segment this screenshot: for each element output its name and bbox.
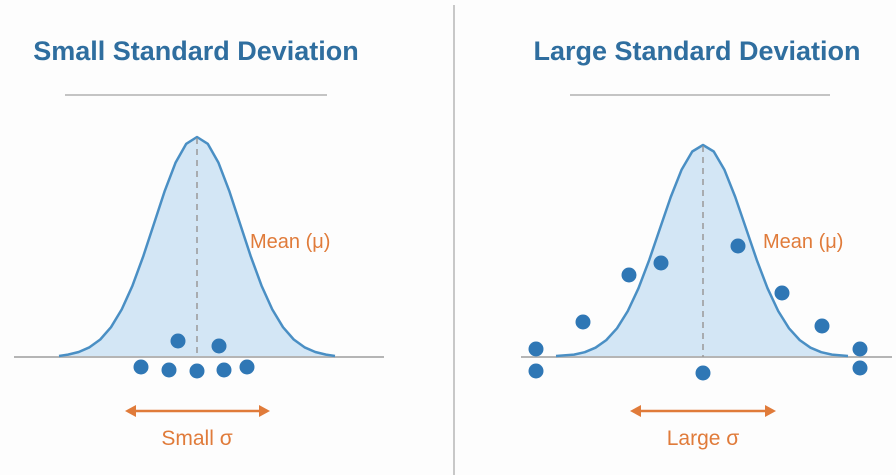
data points: large <box>528 238 868 380</box>
label: large sigma: Large σ <box>667 427 739 450</box>
label: small sigma: Small σ <box>161 427 233 450</box>
label: mean small: Mean (μ) <box>250 231 330 253</box>
chart: wide bell curve <box>556 145 848 356</box>
label: mean large: Mean (μ) <box>763 231 843 253</box>
panel: large standard deviation <box>521 36 892 450</box>
arrow: large sigma <box>630 405 776 417</box>
title: small: Small Standard Deviation <box>33 36 359 66</box>
panel: small standard deviation <box>14 36 384 450</box>
arrow: small sigma <box>125 405 270 417</box>
chart: narrow bell curve <box>59 137 335 356</box>
data points: small <box>134 334 254 378</box>
title: large: Large Standard Deviation <box>533 36 861 66</box>
